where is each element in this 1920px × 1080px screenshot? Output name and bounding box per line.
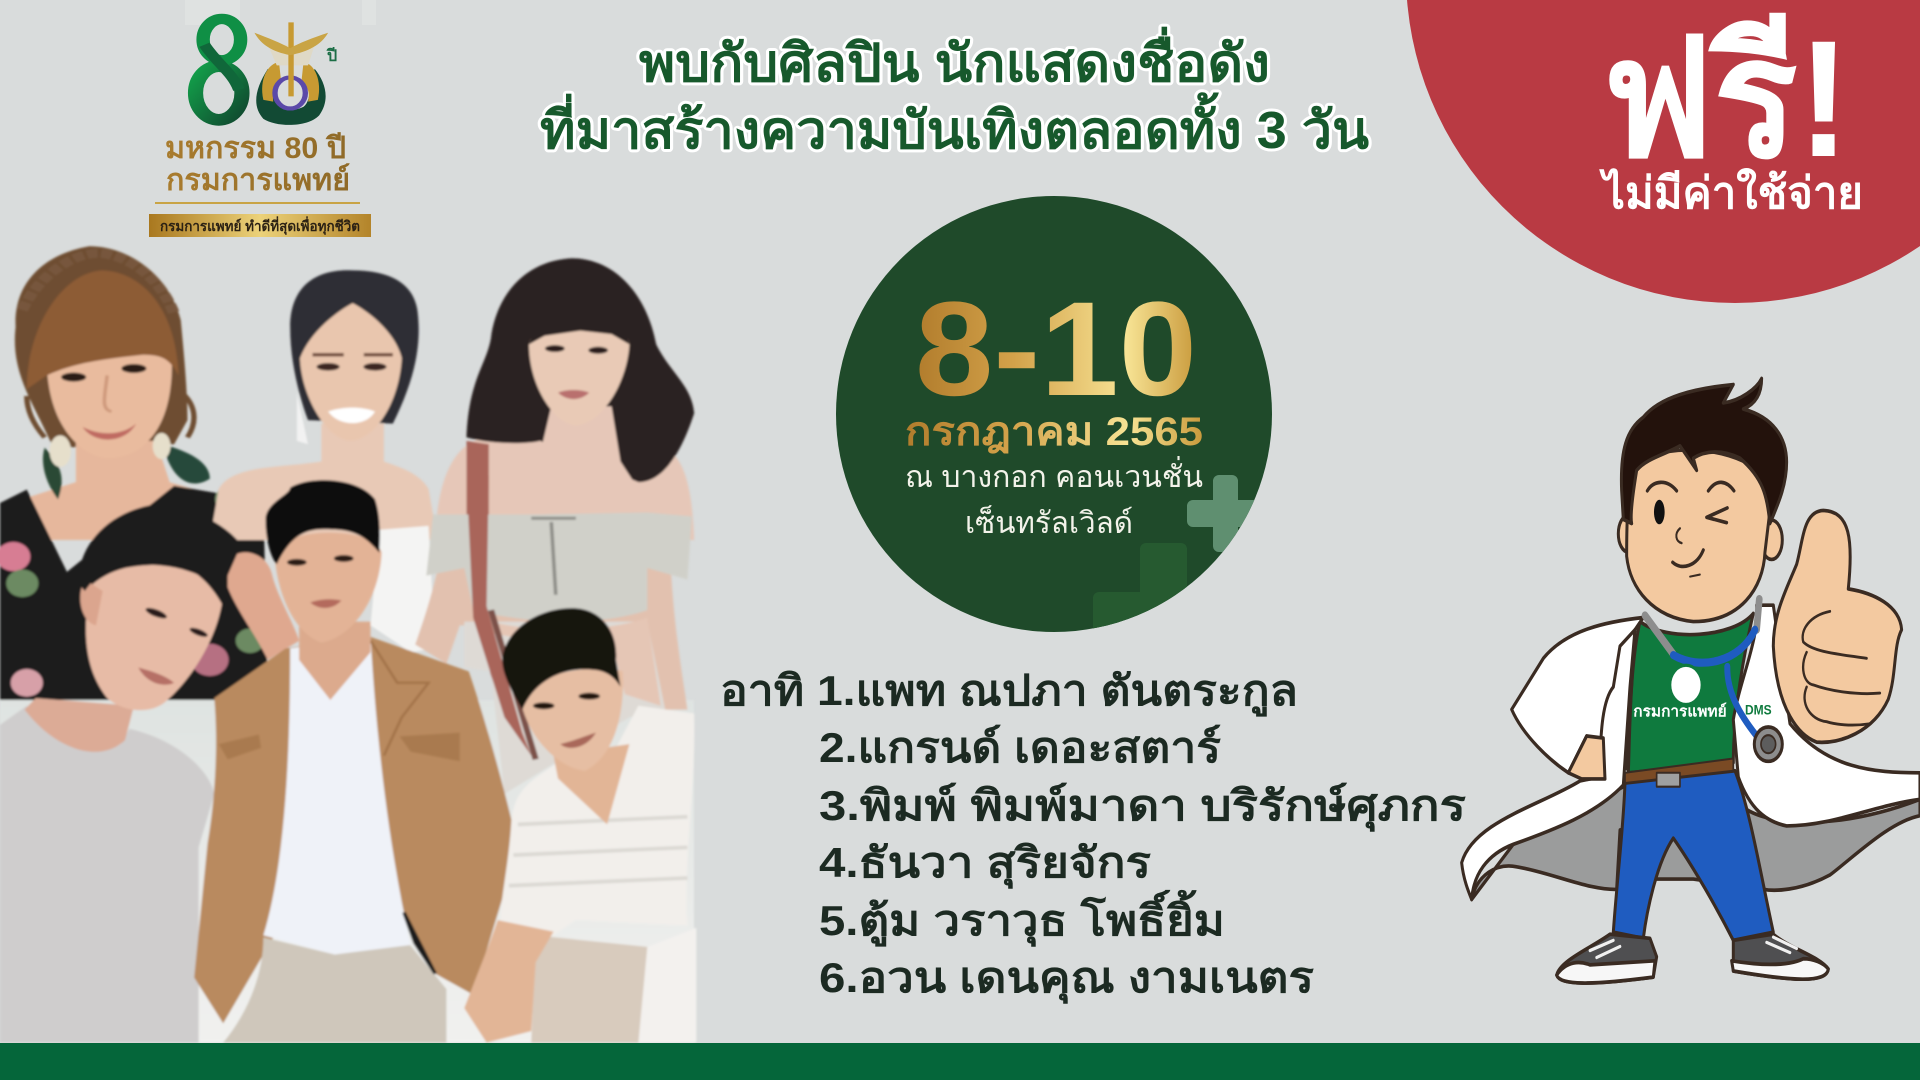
logo slogan band <box>149 214 371 237</box>
title line 2: ที่มาสร้างความบันเทิงตลอดทั้ง 3 วัน <box>540 92 1369 160</box>
mascot belt buckle <box>1657 773 1680 787</box>
mascot left hand <box>1568 736 1605 779</box>
mascot face <box>1627 450 1773 622</box>
list item 5: 5.ตู้ม วราวุธ โพธิ์ยิ้ม <box>819 889 1225 947</box>
artist: man in white shirt <box>464 608 696 1043</box>
artist: man in tan blazer <box>194 480 518 1043</box>
badge headline: ฟรี! <box>1602 7 1850 192</box>
venue line 2: เซ็นทรัลเวิลด์ <box>965 504 1133 540</box>
list item 3: 3.พิมพ์ พิมพ์มาดา บริรักษ์ศุภกร <box>819 782 1467 832</box>
logo: 80 years Department of Medical Services <box>149 19 371 237</box>
green disc <box>836 196 1272 632</box>
photo collage of artists <box>0 246 696 1043</box>
artist: smiling woman with dark updo <box>210 270 437 652</box>
mascot green shirt <box>1628 613 1753 773</box>
mascot belt <box>1625 758 1733 783</box>
mascot right coat panel <box>1733 605 1920 826</box>
mascot ears <box>1618 515 1782 559</box>
mascot left coat tail <box>1462 630 1635 899</box>
red circle <box>1406 0 1920 303</box>
mascot trousers <box>1613 771 1773 940</box>
list item 1: อาทิ 1.แพท ณปภา ตันตระกูล <box>720 667 1298 717</box>
artist schedule list <box>720 667 1467 1004</box>
logo rule <box>155 202 360 204</box>
date circle <box>836 196 1278 652</box>
mascot left sleeve <box>1512 617 1643 773</box>
decorative plus signs <box>1093 475 1254 628</box>
mascot thumbs up hand <box>1773 510 1902 742</box>
photo backdrop <box>0 700 694 1043</box>
faint hexagon backdrop behind logo <box>185 0 376 25</box>
mascot stethoscope <box>1645 599 1782 761</box>
logo title line 2: กรมการแพทย์ <box>166 163 350 197</box>
mascot left shoe <box>1557 934 1657 983</box>
logo slogan text: กรมการแพทย์ ทำดีที่สุดเพื่อทุกชีวิต <box>160 216 360 235</box>
logo title line 1: มหกรรม 80 ปี <box>165 132 346 165</box>
list item 6: 6.อวน เดนคุณ งามเนตร <box>819 954 1314 1004</box>
badge: free of charge <box>1406 0 1920 303</box>
mascot shirt label: กรมการแพทย์ <box>1633 702 1727 721</box>
list item 4: 4.ธันวา สุริยจักร <box>819 839 1151 889</box>
date number: 8-10 <box>915 275 1197 424</box>
venue line 1: ณ บางกอก คอนเวนชั่น <box>905 456 1203 494</box>
title line 1: พบกับศิลปิน นักแสดงชื่อดัง <box>639 27 1270 93</box>
mascot eye and expression <box>1647 482 1734 577</box>
mascot right shoe <box>1732 934 1828 979</box>
title <box>540 27 1369 160</box>
artist: woman with braided hair <box>0 246 268 700</box>
artist: woman with long dark hair <box>415 258 694 794</box>
mascot: doctor giving thumbs up <box>1462 378 1920 983</box>
logo text: year mark: ปี <box>326 46 337 65</box>
month and year: กรกฎาคม 2565 <box>905 410 1203 454</box>
mascot cape <box>1472 785 1920 899</box>
bottom green bar <box>0 1043 1920 1080</box>
mascot coat label: DMS <box>1745 703 1772 718</box>
mascot hair <box>1621 378 1787 523</box>
mascot shirt emblem <box>1670 665 1702 705</box>
badge subtext: ไม่มีค่าใช้จ่าย <box>1599 167 1863 218</box>
artist: man in grey t-shirt <box>0 505 299 1043</box>
list item 2: 2.แกรนด์ เดอะสตาร์ <box>819 724 1221 771</box>
logo mark: number 80 with caduceus <box>196 19 328 125</box>
